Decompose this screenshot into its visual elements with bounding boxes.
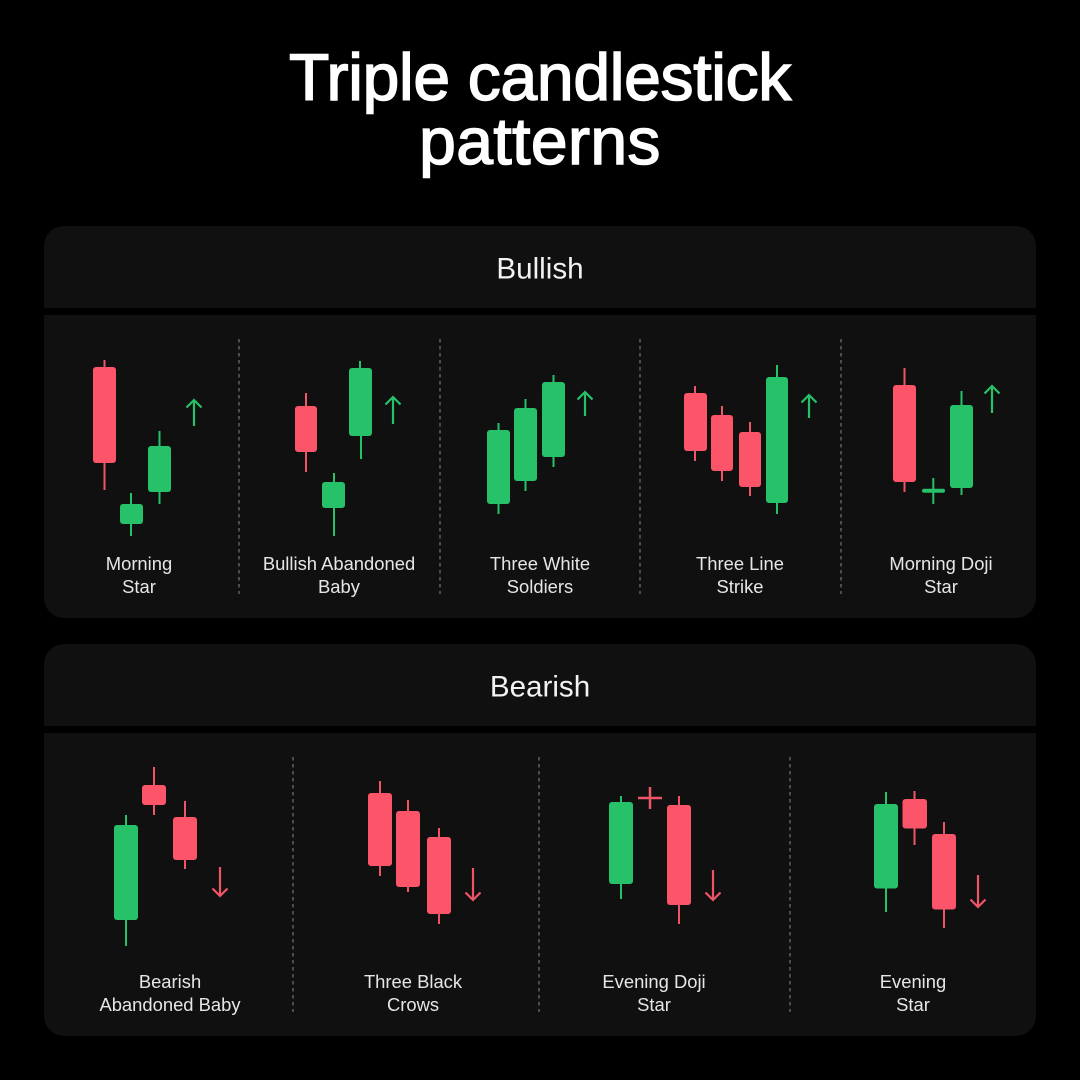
pattern: Evening Star — [874, 791, 986, 1015]
pattern: Three Line Strike: Strike — [716, 576, 764, 597]
pattern: Evening Doji Star: Star — [637, 994, 671, 1015]
pattern: Bearish Abandoned Baby: Bearish — [139, 971, 201, 992]
pattern: Evening Doji Star — [602, 787, 720, 1015]
pattern: Three Black Crows: Crows — [387, 994, 439, 1015]
pattern: Bearish Abandoned Baby — [99, 767, 241, 1015]
pattern: Three White Soldiers: Three White — [490, 553, 590, 574]
pattern: Bullish Abandoned Baby — [263, 361, 415, 597]
panel: bearish patterns — [44, 733, 1036, 1036]
panel: bullish patterns — [44, 315, 1036, 618]
heading: bullish: Bullish — [496, 252, 584, 286]
pattern: Bearish Abandoned Baby: Abandoned Baby — [99, 994, 241, 1015]
pattern: Bullish Abandoned Baby: Baby — [318, 576, 361, 597]
panel: bearish header — [44, 644, 1036, 726]
heading: bearish: Bearish — [490, 670, 590, 704]
title: Triple candlestick — [289, 40, 792, 114]
pattern: Three Black Crows: Three Black — [364, 971, 463, 992]
pattern: Evening Doji Star: Evening Doji — [602, 971, 706, 992]
pattern: Morning Doji Star: Morning Doji — [889, 553, 993, 574]
pattern: Evening Star: Star — [896, 994, 930, 1015]
pattern: Morning Doji Star — [889, 368, 1000, 597]
pattern: Three White Soldiers — [487, 375, 592, 597]
pattern: Bullish Abandoned Baby: Bullish Abandoned — [263, 553, 415, 574]
panel: bullish header — [44, 226, 1036, 308]
pattern: Morning Star: Morning — [106, 553, 172, 574]
pattern: Three Line Strike: Three Line — [696, 553, 784, 574]
pattern: Morning Doji Star: Star — [924, 576, 958, 597]
title: patterns — [419, 104, 661, 178]
pattern: Three White Soldiers: Soldiers — [507, 576, 573, 597]
pattern: Evening Star: Evening — [880, 971, 946, 992]
pattern: Morning Star: Star — [122, 576, 156, 597]
pattern: Three Black Crows — [364, 781, 480, 1015]
pattern: Three Line Strike — [684, 365, 816, 597]
pattern: Morning Star — [93, 360, 202, 597]
